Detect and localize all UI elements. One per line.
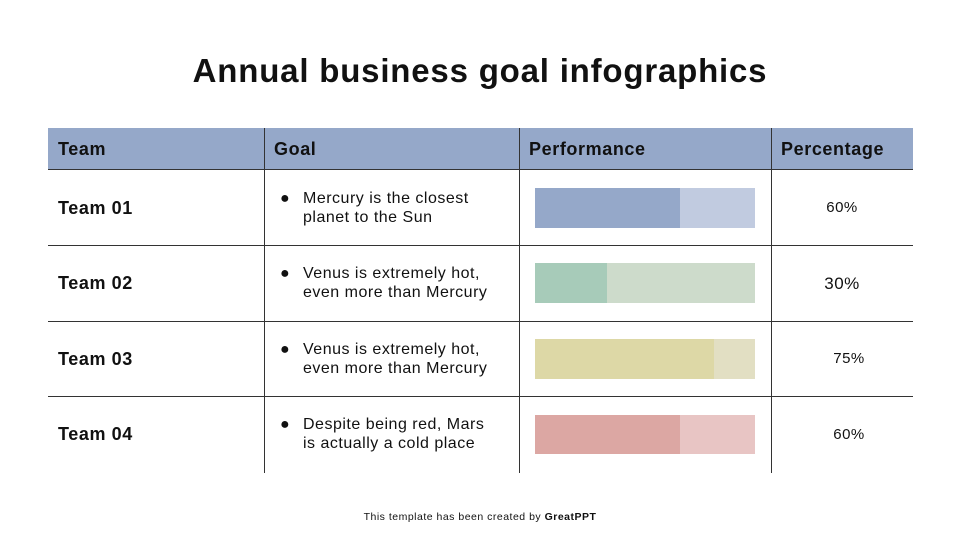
pct 02: 30% — [824, 274, 860, 293]
goal 03 — [280, 341, 487, 377]
header: Team: Team — [58, 139, 106, 159]
goal 03: Venus is extremely hot, — [303, 341, 480, 358]
header row — [48, 128, 913, 170]
pct 03: 75% — [833, 350, 865, 367]
footer: This template has been created by GreatPPT — [364, 511, 596, 523]
goal 04: ● — [280, 416, 290, 433]
goal 03: even more than Mercury — [303, 360, 487, 377]
bar 02 — [535, 263, 755, 303]
header: Performance: Performance — [529, 139, 646, 159]
goal 02: even more than Mercury — [303, 284, 487, 301]
pct 04: 60% — [833, 426, 865, 443]
team 02: Team 02 — [58, 273, 133, 293]
goal 01: planet to the Sun — [303, 209, 432, 226]
goal 04: Despite being red, Mars — [303, 416, 484, 433]
goal 02 — [280, 265, 487, 301]
title: Annual business goal infographics — [193, 52, 767, 89]
pct 01: 60% — [826, 199, 858, 216]
header: Goal: Goal — [274, 139, 316, 159]
goal 02: Venus is extremely hot, — [303, 265, 480, 282]
goal 02: ● — [280, 265, 290, 282]
goal 04: is actually a cold place — [303, 435, 475, 452]
goal 03: ● — [280, 341, 290, 358]
goal 01 — [280, 190, 469, 226]
goal 01: ● — [280, 190, 290, 207]
team 01: Team 01 — [58, 198, 133, 218]
bar 01 — [535, 188, 755, 228]
table — [48, 128, 913, 170]
goal 01: Mercury is the closest — [303, 190, 469, 207]
bar 03 — [535, 339, 755, 379]
team 04: Team 04 — [58, 424, 133, 444]
goal 04 — [280, 416, 484, 452]
bar 04 — [535, 415, 755, 454]
team 03: Team 03 — [58, 349, 133, 369]
header: Percentage: Percentage — [781, 139, 884, 159]
